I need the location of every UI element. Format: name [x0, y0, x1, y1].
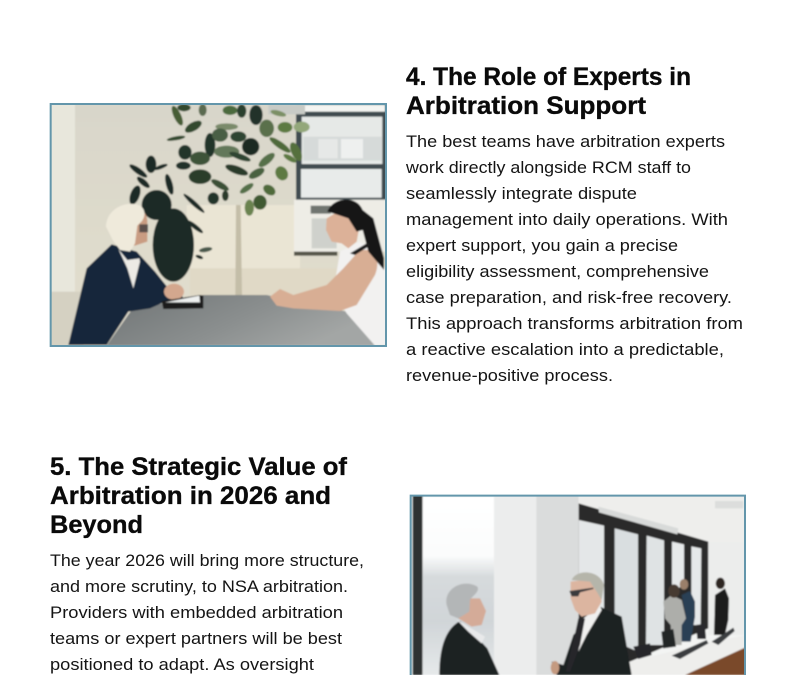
text block: section 5 body: positioned to adapt. As oversight — [50, 656, 314, 674]
text block: section 5 body: Providers with embedded arbitration — [50, 604, 343, 622]
text block: section 5 body: teams or expert partners will be best — [50, 630, 342, 648]
left window — [412, 496, 413, 675]
columns — [494, 495, 536, 675]
background people — [663, 595, 686, 645]
left woman — [68, 244, 183, 345]
tree leaves — [166, 104, 310, 216]
decorative frame — [51, 104, 386, 346]
text block: section 4 body: case preparation, and risk-free recovery. — [406, 289, 732, 307]
text block: section 4 body: work directly alongside RCM staff to — [405, 159, 691, 177]
panel: section 5 strategic value — [50, 453, 747, 675]
air conditioner — [294, 200, 387, 252]
ceiling — [579, 495, 747, 595]
chairs — [633, 643, 652, 659]
boardroom windows — [579, 520, 604, 615]
text block: section 4 body: revenue-positive process. — [406, 367, 613, 385]
text block: section 4 body: The best teams have arbitration experts — [406, 133, 725, 151]
table — [630, 635, 747, 675]
right woman — [333, 242, 387, 346]
right person — [552, 607, 632, 675]
text block: section 4 body: management into daily operations. With — [406, 211, 728, 229]
photo: two executives in a boardroom — [410, 494, 746, 675]
tree trunk — [235, 205, 242, 295]
light fixture — [598, 507, 678, 534]
dark plant — [127, 156, 213, 282]
text block: section 4 body: seamlessly integrate dispute — [406, 185, 637, 203]
heading: section 4 — [406, 63, 691, 120]
text block: section 5 body — [50, 552, 364, 674]
table — [107, 295, 375, 346]
text block: section 4 body — [405, 133, 743, 385]
panel: section 4 experts — [50, 63, 743, 385]
heading: section 4: Arbitration Support — [406, 92, 647, 120]
heading: section 4: 4. The Role of Experts in — [406, 63, 691, 91]
heading: section 5: 5. The Strategic Value of — [50, 453, 348, 481]
window — [296, 104, 387, 200]
left person — [439, 621, 499, 675]
text block: section 4 body: This approach transforms arbitration from — [406, 315, 743, 333]
heading: section 5: Beyond — [50, 511, 143, 539]
text block: section 4 body: eligibility assessment, comprehensive — [406, 263, 709, 281]
text block: section 4 body: a reactive escalation into a predictable, — [406, 341, 724, 359]
heading: section 5 — [50, 453, 348, 539]
photo: two women at a table — [50, 103, 387, 347]
vent — [268, 104, 305, 114]
text block: section 4 body: expert support, you gain a precise — [406, 237, 678, 255]
heading: section 5: Arbitration in 2026 and — [50, 482, 331, 510]
text block: section 5 body: The year 2026 will bring more structure, — [50, 552, 364, 570]
decorative frame — [411, 496, 745, 675]
text block: section 5 body: and more scrutiny, to NSA arbitration. — [50, 578, 348, 596]
